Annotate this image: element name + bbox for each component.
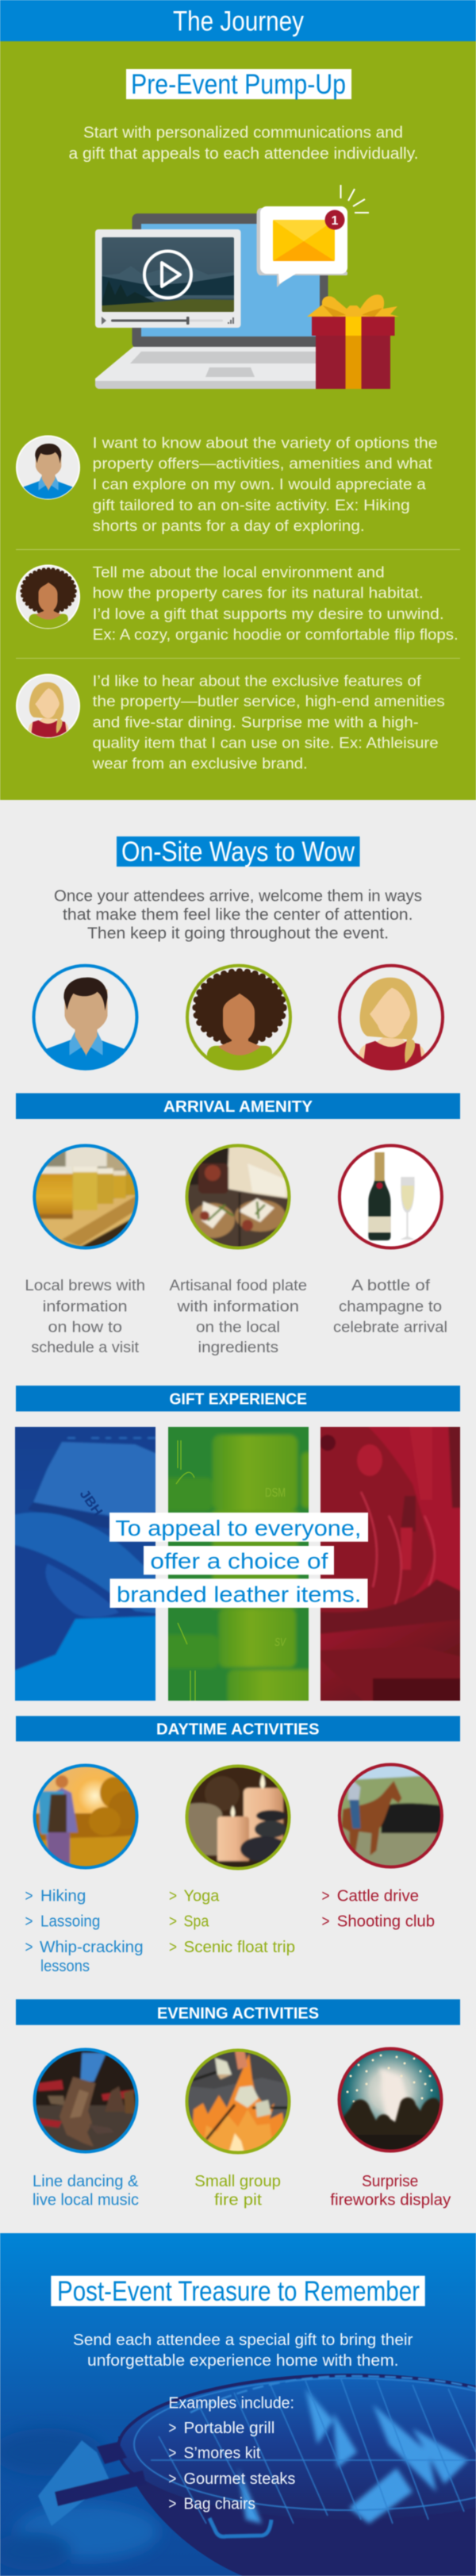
captions: arrival amenity: A bottle of [351, 1278, 431, 1294]
text: persona 1: I want to know about the variety of options the [93, 435, 438, 452]
section bar: gift experience: GIFT EXPERIENCE [170, 1391, 307, 1409]
section bar: gift experience [16, 1386, 460, 1411]
intro text [73, 2332, 413, 2370]
captions: evening activities: Small group [194, 2173, 281, 2190]
callout: branded leather items: offer a choice of [150, 1549, 328, 1574]
persona 1: explorer [17, 435, 438, 535]
intro text: Send each attendee a special gift to bring their [73, 2332, 413, 2349]
intro text: Then keep it going throughout the event. [87, 925, 389, 943]
panel: post-event [0, 2233, 476, 2576]
list: examples: > [168, 2445, 176, 2463]
captions: arrival amenity: information [43, 1298, 128, 1315]
list: hiking activities: Lassoing [40, 1913, 100, 1931]
text: persona 2: I’d love a gift that supports my desire to unwind. [93, 606, 444, 623]
text: persona 1: property offers—activities, amenities and what [93, 456, 432, 473]
avatar: blonde woman [17, 675, 79, 740]
callout: branded leather items: To appeal to everyone, [115, 1516, 361, 1540]
list: wellness activities [169, 1888, 295, 1956]
captions: evening activities: live local music [33, 2191, 139, 2209]
photo: fireworks crowd [336, 2046, 444, 2154]
text: persona 3: wear from an exclusive brand. [92, 755, 308, 773]
list: hiking activities: > [25, 1939, 33, 1956]
monogram SV: SV [274, 1636, 286, 1649]
intro text [68, 124, 419, 163]
avatar: woman with curly hair [187, 966, 290, 1073]
list: hiking activities: > [25, 1888, 33, 1905]
text: persona 3: I’d like to hear about the exclusive features of [93, 673, 421, 690]
header band [0, 0, 476, 41]
background photo: grill [0, 2375, 476, 2576]
callout: branded leather items [109, 1513, 368, 1608]
photo: artisanal food plate [184, 1143, 292, 1251]
title: The Journey [173, 6, 304, 37]
icon: email notification bubble: 1 [332, 214, 339, 228]
list: ranch activities: > [322, 1913, 330, 1931]
photo: local brews [32, 1143, 140, 1251]
captions: evening activities [33, 2173, 451, 2209]
photo: hiker at sunset [32, 1763, 140, 1870]
list: ranch activities: Shooting club [337, 1913, 435, 1931]
captions: evening activities: Line dancing & [33, 2173, 139, 2190]
intro text: a gift that appeals to each attendee individually. [68, 145, 419, 163]
captions: arrival amenity: Local brews with [25, 1278, 145, 1294]
avatars row [33, 966, 443, 1081]
panel: on-site [14, 836, 461, 2209]
section bar: daytime activities: DAYTIME ACTIVITIES [156, 1721, 319, 1739]
list: examples: > [168, 2470, 176, 2488]
heading: post-event treasure: Post-Event Treasure to Remember [57, 2276, 420, 2307]
list: examples: Portable grill [184, 2420, 274, 2437]
photo: cattle drive [337, 1762, 444, 1870]
text: persona 3: and five-star dining. Surprise me with a high- [93, 714, 419, 732]
list: wellness activities: > [169, 1939, 177, 1956]
captions: arrival amenity: celebrate arrival [333, 1319, 447, 1336]
captions: arrival amenity [25, 1278, 447, 1356]
text: persona 3: the property—butler service, high-end amenities [93, 693, 445, 710]
photo: champagne [340, 1146, 442, 1248]
callout: branded leather items: branded leather items. [117, 1582, 361, 1606]
text: persona 2: how the property cares for its natural habitat. [93, 584, 424, 602]
heading: On-Site Ways to Wow: On-Site Ways to Wow [121, 836, 355, 867]
captions: arrival amenity: on the local [196, 1319, 280, 1336]
list: hiking activities: Whip-cracking [40, 1939, 144, 1956]
photo: marshmallows over fire pit [184, 2047, 292, 2155]
monogram DSM: DSM [265, 1486, 286, 1500]
list: examples: > [168, 2496, 176, 2513]
list: examples: Gourmet steaks [184, 2470, 295, 2488]
list: hiking activities [25, 1888, 144, 1975]
text: persona 1 [93, 435, 438, 535]
text: persona 1: gift tailored to an on-site activity. Ex: Hiking [93, 497, 410, 514]
captions: evening activities: fireworks display [330, 2191, 451, 2209]
intro text [54, 888, 422, 943]
captions: evening activities: fire pit [214, 2191, 262, 2209]
list: ranch activities: Cattle drive [337, 1888, 419, 1905]
section bar: evening activities: EVENING ACTIVITIES [157, 2005, 319, 2022]
list: examples: Bag chairs [184, 2496, 255, 2513]
text: persona 3: quality item that I can use on site. Ex: Athleisure [93, 735, 439, 752]
photo: line dancing boots [32, 2047, 140, 2154]
captions: evening activities: Surprise [362, 2173, 418, 2190]
section bar: arrival amenity: ARRIVAL AMENITY [163, 1098, 313, 1116]
captions: arrival amenity: schedule a visit [31, 1340, 140, 1356]
section bar: arrival amenity [16, 1094, 460, 1119]
list: wellness activities: > [169, 1913, 177, 1931]
list: examples [168, 2394, 295, 2513]
list: wellness activities: Spa [184, 1913, 209, 1931]
text: persona 3 [92, 673, 445, 773]
list: ranch activities [322, 1888, 435, 1931]
avatar: woman with curly hair [17, 565, 79, 630]
avatar: man [33, 966, 136, 1081]
list: examples: > [168, 2420, 176, 2437]
icon: video player [95, 229, 241, 328]
panel: red boots photo [320, 1426, 461, 1701]
list: examples: S’mores kit [184, 2445, 261, 2463]
persona 2: nature lover [17, 563, 459, 644]
captions: arrival amenity: Artisanal food plate [170, 1278, 307, 1294]
section bar: evening activities [16, 1999, 460, 2025]
heading: Pre-Event Pump-Up: Pre-Event Pump-Up [131, 69, 346, 100]
persona 3: luxury seeker [17, 673, 445, 773]
panel: green leather photo [167, 1426, 309, 1701]
list: ranch activities: > [322, 1888, 330, 1905]
captions: arrival amenity: champagne to [339, 1298, 442, 1315]
list: wellness activities: Yoga [184, 1888, 220, 1905]
captions: arrival amenity: on how to [48, 1319, 122, 1336]
avatar: blonde woman [340, 966, 443, 1073]
panel: blue hat photo [14, 1426, 156, 1701]
illustration: laptop with video, email and gift [95, 185, 399, 389]
intro text: unforgettable experience home with them. [87, 2352, 398, 2370]
captions: arrival amenity: with information [176, 1298, 299, 1315]
text: persona 1: I can explore on my own. I would appreciate a [93, 476, 426, 494]
icon: email notification bubble [257, 185, 369, 287]
panel: pre-event [0, 41, 476, 800]
captions: arrival amenity: ingredients [198, 1340, 278, 1356]
intro text: Once your attendees arrive, welcome them in ways [54, 888, 422, 905]
icon: laptop [95, 213, 333, 389]
list: wellness activities: > [169, 1888, 177, 1905]
section bar: daytime activities [16, 1716, 460, 1741]
text: persona 2: Tell me about the local environment and [93, 563, 385, 581]
list: wellness activities: Scenic float trip [184, 1939, 295, 1956]
text: persona 1: shorts or pants for a day of exploring. [93, 517, 365, 535]
icon: gift box [307, 294, 399, 389]
avatar: man [17, 436, 79, 506]
list: hiking activities: > [25, 1913, 33, 1931]
monogram on hat: JBH [77, 1486, 106, 1519]
list: hiking activities: lessons [40, 1958, 90, 1975]
intro text: that make them feel like the center of attention. [63, 906, 413, 924]
list: hiking activities: Hiking [40, 1888, 86, 1905]
text: persona 2: Ex: A cozy, organic hoodie or comfortable flip flops. [93, 626, 459, 644]
text: persona 2 [93, 563, 459, 644]
photo: candles and spa stones [184, 1763, 292, 1871]
intro text: Start with personalized communications and [83, 124, 403, 141]
list: examples: Examples include: [168, 2394, 294, 2412]
